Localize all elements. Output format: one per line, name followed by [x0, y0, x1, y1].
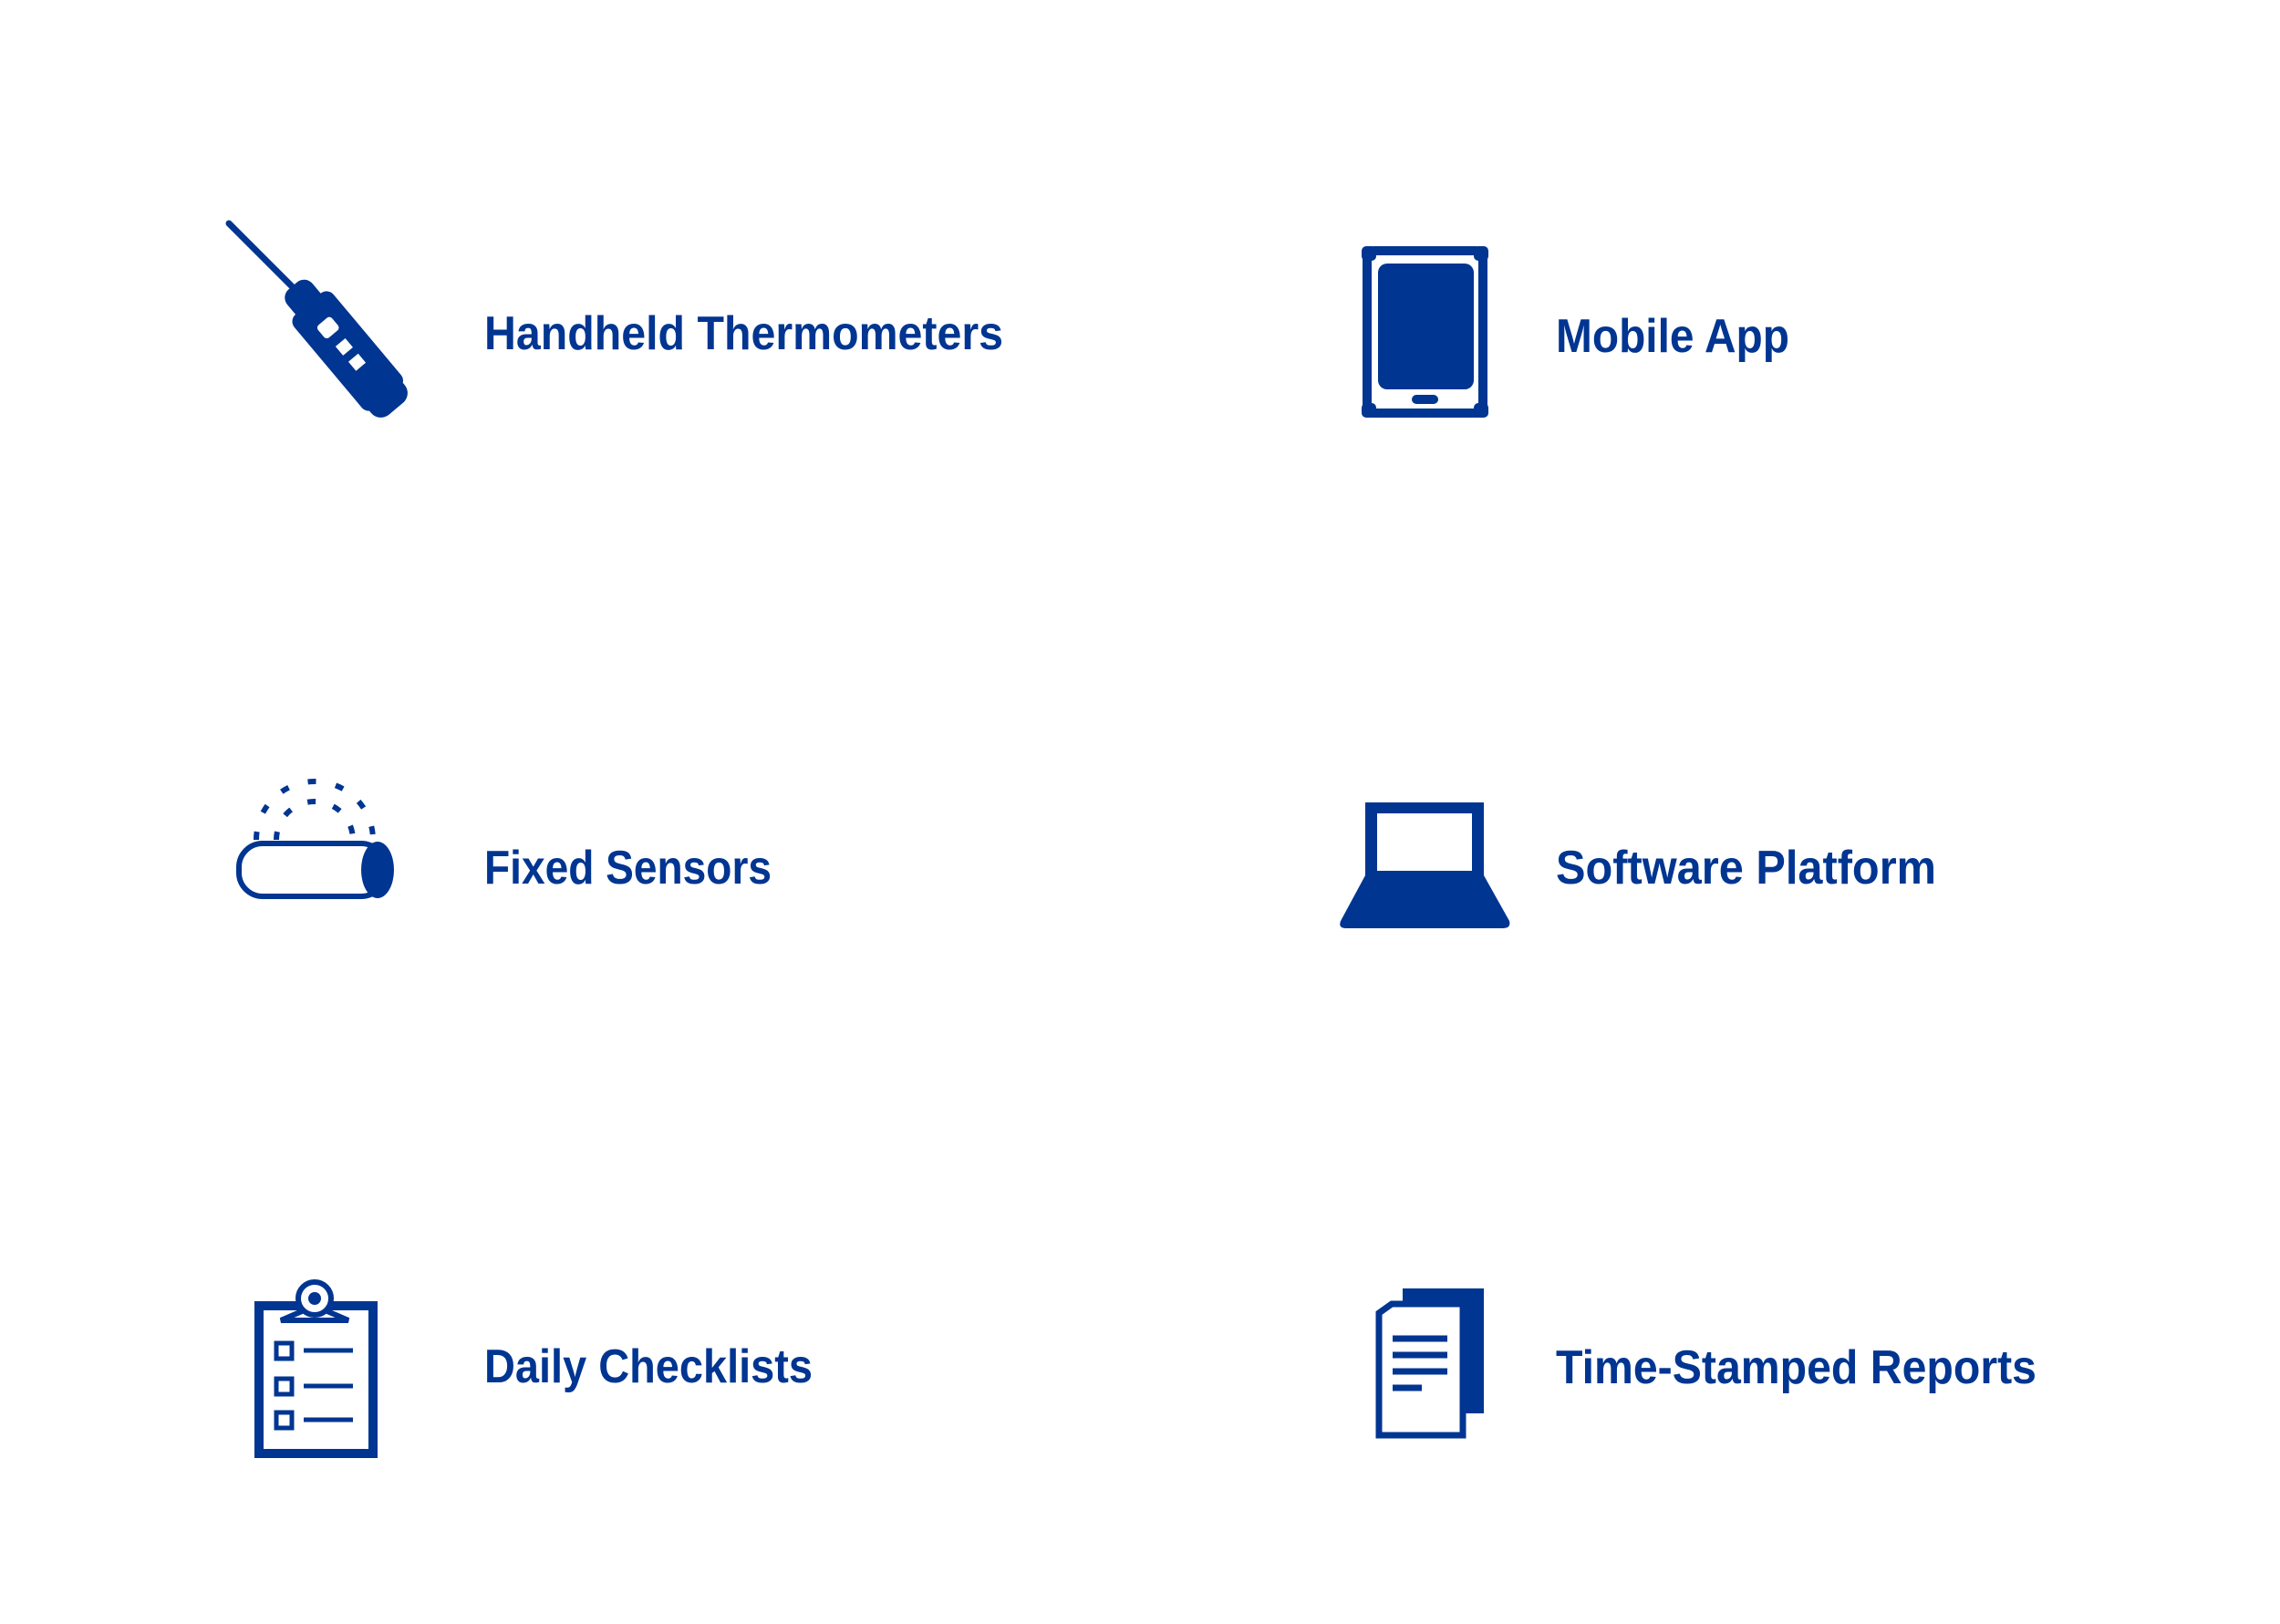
icon: handheld thermometer	[229, 223, 416, 425]
label: Daily Checklists: Daily Checklists	[484, 1340, 813, 1393]
icon: time-stamped reports	[1379, 1288, 1484, 1435]
icon: clipboard	[259, 1282, 373, 1453]
label: Time-Stamped Reports: Time-Stamped Reports	[1556, 1341, 2036, 1394]
label: Fixed Sensors: Fixed Sensors	[484, 842, 772, 895]
icon: fixed sensor	[239, 781, 394, 898]
label: Software Platform: Software Platform	[1556, 842, 1936, 895]
icon: laptop	[1340, 802, 1509, 928]
label: Handheld Thermometers: Handheld Thermometers	[484, 307, 1003, 360]
icon: mobile app phone	[1362, 246, 1488, 418]
label: Mobile App: Mobile App	[1556, 310, 1789, 363]
